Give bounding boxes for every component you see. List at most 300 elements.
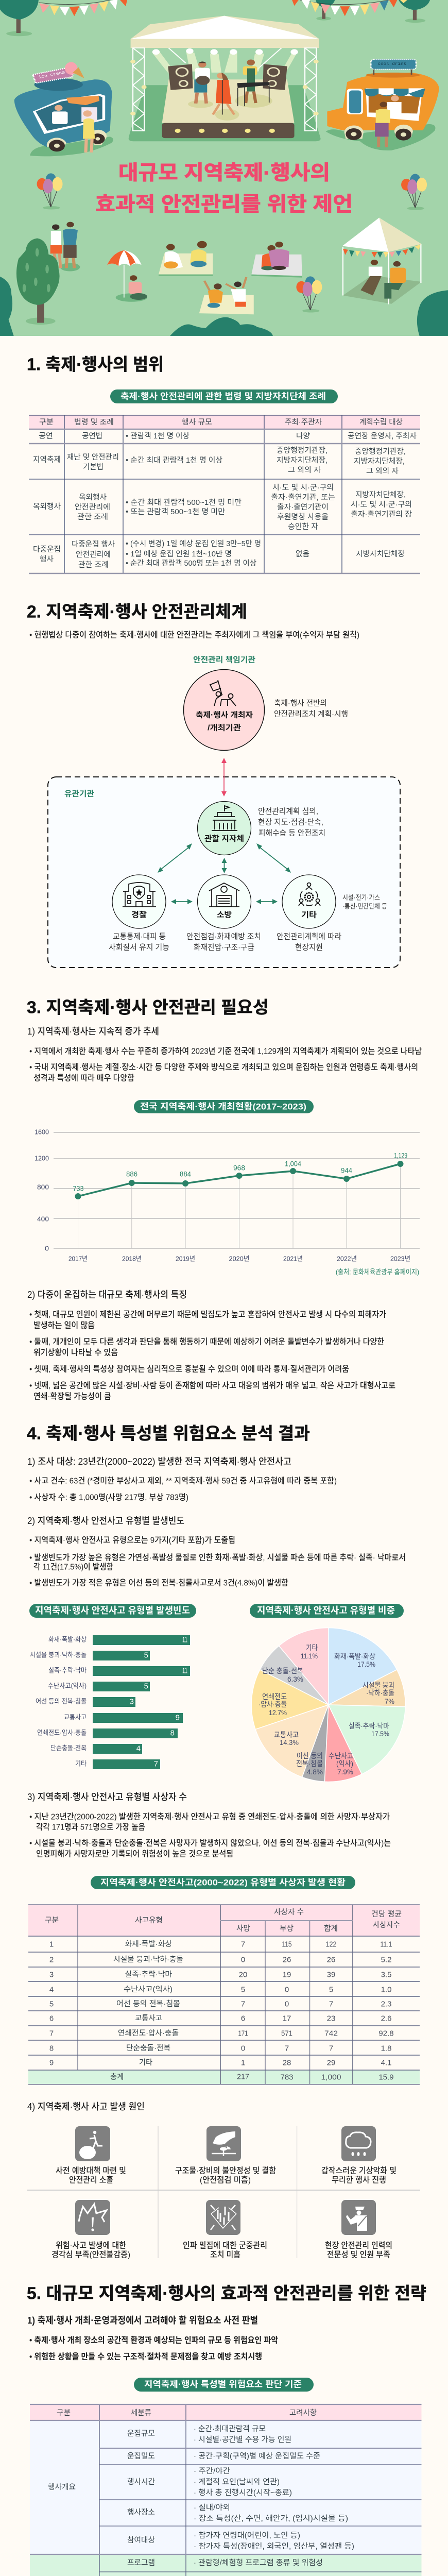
row: performance [39, 432, 417, 440]
row: local festival: 그 외의 자 [288, 466, 321, 474]
row: crowd event: 행사 [40, 555, 54, 564]
bar labels: 화재·폭발·화상 [48, 1635, 87, 1643]
pill heading: risk criteria [134, 2378, 314, 2392]
row: local festival [33, 446, 406, 476]
node: local government [198, 802, 251, 855]
bar labels: 교통사고 [64, 1714, 87, 1721]
row: outdoor event: 후원명칭 사용을 [277, 513, 329, 521]
row 9: 28 [283, 2059, 291, 2067]
group: event overview: · 주간/야간 [194, 2467, 230, 2476]
cause: sudden weather: 무리한 행사 진행 [332, 2175, 386, 2184]
pie labels: 연쇄전도 [262, 1692, 287, 1701]
subheading 4-2: 2) 지역축제·행사 안전사고 유형별 발생빈도 [27, 1516, 184, 1526]
row 6: 17 [283, 2014, 291, 2023]
cause: sudden weather [321, 2126, 397, 2184]
node: police [112, 875, 166, 928]
row 5: 7 [329, 2000, 333, 2008]
bar values: 5 [144, 1651, 148, 1660]
balloons: right [401, 174, 427, 210]
text block 3-2: • 둘째, 개개인이 모두 다른 생각과 판단을 통해 행동하기 때문에 예상하기 어려운 돌발변수가 발생하거나 다양한 [29, 1337, 384, 1347]
table header row [39, 418, 403, 427]
row 9: 기타 [139, 2058, 152, 2067]
note: other bodies role: 현장지원 [295, 943, 323, 952]
group: event overview: · 순간·최대관람객 규모 [194, 2425, 266, 2433]
header row: 사상자수 [373, 1921, 400, 1929]
row: outdoor event: 옥외행사 [79, 493, 107, 502]
row 4: 5 [329, 1986, 333, 1994]
text block 3-2: 발생하는 일이 많음 [33, 1321, 95, 1330]
row 1 [49, 1940, 392, 1948]
pill heading: legal framework [110, 389, 338, 403]
text block 3-2: • 넷째, 넓은 공간에 많은 시설·장비·사람 등이 존재함에 따라 사고 대응의 범위가 매우 넓고, 작은 사고가 대형사고로 [29, 1381, 395, 1390]
arrows: agency links [158, 843, 291, 904]
group: event overview: 행사장소 [127, 2508, 155, 2517]
row: local festival: 그 외의 자 [366, 467, 399, 476]
group: event overview: · 행사 총 진행시간(시작~종료) [194, 2488, 292, 2497]
text block 3-2: • 첫째, 대규모 인원이 제한된 공간에 머무르기 때문에 밀집도가 높고 혼잡하여 안전사고 발생 시 다수의 피해자가 [29, 1310, 386, 1319]
pill heading: casualties table: 지역축제·행사 안전사고(2000~2022) 유형별 사상자 발생 현황 [100, 1877, 346, 1888]
bar values: 11 [182, 1666, 187, 1675]
total row: 1,000 [321, 2073, 341, 2081]
title [95, 162, 353, 215]
tree: top right [316, 0, 430, 23]
text block 3-2: 위기상황이 나타날 수 있음 [33, 1348, 118, 1357]
panel: related agencies [48, 777, 400, 968]
cause: structural instability [175, 2126, 276, 2184]
group: event overview: · 공간·구획(구역)별 예상 운집밀도 수준 [194, 2452, 320, 2461]
row 1: 7 [241, 1940, 245, 1948]
note: host role: 축제·행사 전반의 [274, 699, 327, 708]
bar chart: accident frequency [30, 1635, 190, 1769]
row: performance: 다양 [296, 432, 310, 440]
pie labels: ·압사·충돌 [259, 1700, 287, 1708]
row: crowd event: • 1일 예상 운집 인원 1천~10만 명 [126, 550, 232, 558]
table header row: 구분 [39, 418, 54, 427]
pill heading: casualties table [91, 1876, 355, 1889]
row: outdoor event: 관한 조례 [77, 513, 108, 521]
pie labels: 수난사고 [329, 1752, 353, 1760]
row: crowd event: 없음 [296, 550, 309, 558]
row 3: 3.5 [381, 1970, 391, 1979]
note: fire role [186, 933, 261, 952]
table: risk criteria [30, 2404, 421, 2576]
bar values: 5 [144, 1682, 148, 1691]
row: outdoor event [33, 483, 412, 531]
pill heading: frequency [29, 1604, 196, 1618]
text block 3-1: 성격과 특성에 따라 매우 다양함 [33, 1074, 134, 1083]
row 9: 9 [49, 2059, 54, 2067]
note: others role [342, 893, 387, 910]
balloons: lower [296, 276, 322, 313]
row 4: 5 [241, 1986, 245, 1994]
note: fire role: 화재진압·구조·구급 [194, 943, 254, 952]
row 5: 어선 등의 전복·침몰 [116, 1999, 180, 2008]
header row: 사상자 수 [274, 1908, 304, 1917]
note: police role: 교통통제·대피 등 [113, 933, 166, 941]
row 8: 7 [285, 2044, 289, 2053]
bar labels: 어선 등의 전복·침몰 [36, 1697, 87, 1705]
pill heading: frequency: 지역축제·행사 안전사고 유형별 발생빈도 [35, 1605, 190, 1616]
value labels: 733 [73, 1185, 83, 1192]
text block 4-3: 인명피해가 사망자로만 기록되어 위험성이 높은 것으로 분석됨 [36, 1850, 233, 1859]
total row [110, 2072, 393, 2081]
x axis labels: 2017년 [68, 1255, 88, 1262]
text block 4-3: 각각 171명과 571명으로 가장 높음 [36, 1823, 145, 1832]
value labels: 884 [180, 1171, 191, 1178]
note: others role: 시설·전기·가스 [342, 893, 380, 902]
row 7: 7 [49, 2029, 54, 2038]
pie labels: 실족·추락·낙마 [349, 1722, 389, 1730]
food truck: cool drink: cool drink [378, 61, 406, 66]
bar labels: 실족·추락·낙마 [48, 1666, 87, 1674]
pill heading: festivals chart: 전국 지역축제·행사 개최현황(2017~2023) [140, 1101, 306, 1112]
bar labels: 단순충돌·전복 [50, 1744, 87, 1752]
node: fire service: 소방 [217, 911, 232, 919]
bunting: top right [292, 0, 407, 16]
value labels: 1,129 [394, 1152, 407, 1159]
pie labels: 12.7% [269, 1708, 287, 1717]
cause: low awareness [51, 2200, 130, 2260]
food truck: ice cream: ice cream [38, 70, 66, 80]
row 3: 20 [239, 1970, 247, 1979]
tree: top left [0, 0, 39, 36]
subheading 5-1: 1) 축제·행사 개최·운영과정에서 고려해야 할 위험요소 사전 판별 [27, 2315, 258, 2326]
row 6: 23 [327, 2014, 335, 2023]
header row [45, 1908, 402, 1933]
note: other bodies role: 안전관리계획에 따라 [277, 933, 341, 941]
section 2 bullet: • 현행법상 다중이 참여하는 축제·행사에 대한 안전관리는 주최자에게 그 책임을 부여(수익자 부담 원칙) [29, 631, 359, 640]
row: local festival: • 순간 최대 관람객 1천 명 이상 [126, 456, 222, 465]
pie labels [259, 1643, 394, 1776]
bar labels: 수난사고(익사) [48, 1682, 87, 1690]
group: event overview [48, 2425, 354, 2551]
pie labels: ·낙하·충돌 [366, 1689, 394, 1697]
y axis labels: 0 [45, 1245, 49, 1252]
stage with band [129, 16, 321, 141]
note: local government role: 피해수습 등 안전조치 [259, 828, 325, 838]
pie labels: 단순 충돌·전복 [262, 1667, 303, 1675]
row 7: 742 [324, 2029, 338, 2038]
row 6: 6 [241, 2014, 245, 2023]
subheading 4-4: 4) 지역축제·행사 사고 발생 원인 [27, 2102, 145, 2112]
y axis labels: 800 [37, 1183, 49, 1191]
pill heading: share [250, 1604, 404, 1618]
cause: crowd control [183, 2200, 267, 2260]
pie labels: 어선 등의 [297, 1752, 323, 1760]
canopy tent with couple [342, 217, 421, 304]
pie labels: (익사) [336, 1759, 353, 1768]
bar values: 11 [182, 1635, 187, 1645]
cause: lack of prevention: 사전 예방대책 마련 및 [56, 2166, 126, 2175]
text block 4-2 [29, 1535, 406, 1588]
hero illustration: festival park scene [0, 0, 448, 336]
pie labels: 기타 [306, 1643, 318, 1652]
icon grid: accident causes [27, 2126, 420, 2260]
row 5: 0 [285, 2000, 289, 2008]
row 9: 29 [327, 2059, 335, 2067]
text block 3-1: • 국내 지역축제·행사는 계절·장소·시간 등 다양한 주제와 방식으로 개최되고 있으며 운집하는 인원과 연령층도 축제·행사의 [29, 1062, 418, 1072]
title: 효과적 안전관리를 위한 제언 [95, 194, 353, 215]
cause: lack of trained staff: 전문성 및 인원 부족 [327, 2250, 390, 2260]
row: crowd event [33, 539, 405, 569]
bar values [130, 1635, 187, 1768]
header row: 고려사항 [289, 2409, 317, 2417]
section 2 heading: 2. 지역축제·행사 안전관리체계 [27, 602, 247, 621]
cause: lack of prevention [56, 2126, 126, 2184]
bar labels [30, 1635, 87, 1767]
subheading 4-1: 1) 조사 대상: 23년간(2000~2022) 발생한 전국 지역축제·행사 안전사고 [27, 1456, 291, 1467]
picnic mat: cheering friends [199, 277, 254, 314]
node: police: 경찰 [131, 911, 147, 919]
bar values: 8 [170, 1729, 175, 1737]
bar values: 4 [136, 1744, 141, 1753]
cause: low awareness: 경각심 부족(안전불감증) [51, 2250, 130, 2260]
couple with ice cream [50, 222, 80, 272]
row 8 [49, 2044, 391, 2053]
value labels: 968 [233, 1164, 245, 1172]
bar labels: 시설물 붕괴·낙하·충돌 [30, 1651, 87, 1659]
pie labels: 4.8% [307, 1768, 323, 1776]
subheading 4-3: 3) 지역축제·행사 안전사고 유형별 사상자 수 [27, 1792, 187, 1802]
cause: lack of prevention: 안전관리 소홀 [69, 2175, 113, 2184]
total row: 총계 [110, 2073, 124, 2081]
header row: 건당 평균 [371, 1910, 402, 1919]
pie labels: 교통사고 [274, 1731, 299, 1739]
row 3: 실족·추락·낙마 [125, 1970, 172, 1979]
row 8: 1.8 [381, 2044, 391, 2053]
row 6: 6 [49, 2014, 54, 2023]
table header row: 행사 규모 [182, 418, 212, 427]
group: event overview: 행사시간 [127, 2478, 155, 2486]
label: related agencies: 유관기관 [64, 789, 94, 799]
pie labels: 11.1% [301, 1652, 318, 1660]
row 5: 7 [241, 2000, 245, 2008]
row 7 [49, 2029, 394, 2038]
node: others [282, 875, 336, 928]
text block 4-2: • 지역축제·행사 안전사고 유형으로는 9가지(기타 포함)가 도출됨 [29, 1535, 235, 1545]
subheading 3-1: 1) 지역축제·행사는 지속적 증가 추세 [27, 1026, 159, 1037]
note: other bodies role [277, 933, 341, 952]
section 4 heading: 4. 축제·행사 특성별 위험요소 분석 결과 [27, 1424, 310, 1443]
row: local festival: 지역축제 [33, 455, 61, 464]
cause: sudden weather: 갑작스러운 기상악화 및 [321, 2166, 397, 2175]
picnic mat: couple two [251, 242, 302, 278]
section 3 heading: 3. 지역축제·행사 안전관리 필요성 [27, 997, 269, 1017]
bar values: 3 [130, 1697, 134, 1706]
pie labels: 7.9% [337, 1768, 353, 1776]
row 1: 11.1 [380, 1940, 392, 1948]
group: event overview: · 시설별·공간별 수용 가능 인원 [194, 2435, 291, 2444]
subheading 3-2: 2) 다중이 운집하는 대규모 축제·행사의 특징 [27, 1290, 187, 1300]
row 2: 2 [49, 1956, 54, 1964]
header row: 사망 [236, 1924, 250, 1933]
text block 4-3: • 시설물 붕괴·낙하·충돌과 단순충돌·전복은 사망자가 발생하지 않았으나, 어선 등의 전복·침몰과 수난사고(익사)는 [29, 1838, 391, 1848]
total row: 217 [237, 2072, 249, 2081]
row: crowd event: • 순간 최대 관람객 500명 또는 1천 명 이상 [126, 559, 256, 568]
table: legal framework [29, 415, 420, 573]
row 6: 교통사고 [135, 2014, 162, 2023]
text block 4-2: 각 11건(17.5%)이 발생함 [33, 1562, 113, 1571]
text block 4-1: • 사고 건수: 63건 (*경미한 부상사고 제외, ** 지역축제·행사 59건 중 사고유형에 따라 중복 포함) [29, 1477, 337, 1486]
row: performance: 공연장 운영자, 주최자 [348, 432, 417, 440]
row: outdoor event: 시·도 및 시·군·구의 [351, 500, 412, 509]
text block 5-1: • 축제·행사 개최 장소의 공간적 환경과 예상되는 인파의 규모 등 위험요인 파악 [29, 2335, 278, 2345]
total row: 15.9 [379, 2073, 393, 2081]
bar values: 9 [176, 1714, 180, 1722]
row 1: 115 [282, 1940, 291, 1948]
note: local government role: 현장 지도·점검·단속, [258, 818, 323, 826]
y axis labels: 400 [37, 1215, 49, 1223]
x axis labels: 2019년 [176, 1255, 195, 1262]
line chart: festivals per year [35, 1128, 420, 1276]
row: performance: • 관람객 1천 명 이상 [126, 432, 189, 440]
pie labels: 14.3% [280, 1738, 299, 1747]
diagram: safety management system [48, 655, 400, 968]
header row: 합계 [324, 1924, 338, 1933]
group: event overview: · 계절적 요인(날씨와 연관) [194, 2478, 280, 2486]
row 8: 8 [49, 2044, 54, 2053]
value labels: 886 [126, 1171, 137, 1178]
table header row: 법령 및 조례 [74, 418, 114, 427]
header row: 세분류 [131, 2409, 151, 2417]
row 7: 연쇄전도·압사·충돌 [118, 2029, 179, 2038]
row 2: 시설물 붕괴·낙하·충돌 [113, 1955, 183, 1964]
text block 3-2 [29, 1310, 395, 1401]
row 2: 26 [283, 1956, 291, 1964]
row: outdoor event: • 또는 관람객 500~1천 명 미만 [126, 507, 225, 516]
row 2: 26 [327, 1956, 335, 1964]
x axis labels: 2021년 [283, 1255, 303, 1262]
header row: 사고유형 [135, 1916, 163, 1925]
bar values: 7 [154, 1760, 158, 1768]
row 4: 수난사고(익사) [124, 1985, 173, 1994]
picnic mat: couple one [159, 241, 213, 276]
row 9: 1 [241, 2059, 245, 2067]
row: local festival: 중앙행정기관장, [277, 446, 328, 455]
label: responsible body: 안전관리 책임기관 [193, 655, 255, 665]
bunting: top left [39, 0, 127, 16]
row 4: 0 [285, 1986, 289, 1994]
row 5: 2.3 [381, 2000, 391, 2008]
pie labels: 시설물 붕괴 [363, 1681, 394, 1689]
header row: 부상 [280, 1924, 294, 1933]
row: local festival: 기본법 [83, 463, 104, 471]
tree: large left [16, 238, 60, 325]
row: outdoor event: 승인한 자 [288, 522, 318, 531]
pill heading: festivals chart [134, 1100, 314, 1113]
y axis labels: 1600 [35, 1128, 49, 1136]
section 1 heading: 1. 축제·행사의 범위 [27, 354, 164, 374]
row 8: 7 [329, 2044, 333, 2053]
row 7: 92.8 [378, 2029, 394, 2038]
table: casualties by type [28, 1905, 420, 2084]
row: local festival: 재난 및 안전관리 [67, 453, 119, 462]
row: outdoor event: 시·도 및 시·군·구의 [272, 483, 334, 492]
pie labels: 전복·침몰 [296, 1759, 323, 1768]
node: local government: 관할 지자체 [204, 835, 244, 843]
row 1: 화재·폭발·화상 [125, 1940, 172, 1948]
text block 3-1: • 지역에서 개최한 축제·행사 수는 꾸준히 증가하여 2023년 기준 전국에 1,129개의 지역축제가 계획되어 있는 것으로 나타남 [29, 1047, 422, 1056]
header row: 구분 [45, 1917, 59, 1925]
pill heading: legal framework: 축제·행사 안전관리에 관한 법령 및 지방자치단체 조례 [120, 392, 326, 401]
text block 4-2: • 발생빈도가 가장 적은 유형은 어선 등의 전복·침몰사고로서 3건(4.8%)이 발생함 [29, 1579, 288, 1588]
row 2: 5.2 [381, 1956, 391, 1964]
bar labels: 기타 [75, 1760, 87, 1767]
group: event overview: 운집규모 [127, 2429, 155, 2438]
pie labels: 17.5% [357, 1660, 375, 1668]
row 9 [49, 2058, 391, 2067]
table header row: 주최·주관자 [285, 418, 322, 427]
row: performance: 공연 [39, 432, 53, 440]
row 9: 4.1 [381, 2059, 391, 2067]
row 2 [49, 1955, 391, 1964]
value labels: 1,004 [285, 1160, 301, 1167]
note: police role [109, 933, 169, 952]
row: crowd event: • (수시 변경) 1일 예상 운집 인원 3만~5만 명 [126, 539, 261, 548]
cause: structural instability: 구조물·장비의 불안정성 및 결함 [175, 2166, 276, 2175]
row 4: 1.0 [381, 1986, 391, 1994]
source note: (출처: 문화체육관광부 홈페이지) [336, 1268, 419, 1276]
text block 4-3: • 지난 23년간(2000-2022) 발생한 지역축제·행사 안전사고 유형 중 연쇄전도·압사·충돌에 의한 사망자·부상자가 [29, 1812, 390, 1822]
bar labels: 연쇄전도·압사·충돌 [37, 1729, 87, 1736]
row: performance: 공연법 [82, 432, 102, 440]
group: event overview: · 장소 특성(산, 수면, 해안가, (임시)시설물 등) [194, 2514, 348, 2523]
row 3 [49, 1970, 391, 1979]
table header row: 계획수립 대상 [359, 418, 403, 427]
row 1: 1 [49, 1940, 54, 1948]
row 3: 3 [49, 1970, 54, 1979]
node: host organiser [183, 670, 265, 750]
row 8: 0 [241, 2044, 245, 2053]
text block 4-1: • 사상자 수: 총 1,000명(사망 217명, 부상 783명) [29, 1493, 188, 1502]
row: outdoor event: 출자·출연기관의 장 [351, 510, 412, 519]
row 5: 5 [49, 2000, 54, 2008]
text block 4-1 [29, 1477, 337, 1502]
food truck: ice cream [14, 62, 113, 156]
row 2: 0 [241, 1956, 245, 1964]
row: crowd event: 관한 조례 [78, 561, 109, 569]
group: event overview: 운집밀도 [127, 2452, 155, 2461]
data line [75, 1161, 404, 1199]
text block 3-2: 연쇄·확장될 가능성이 큼 [33, 1392, 111, 1401]
parasol with person [107, 250, 147, 302]
food truck: cool drink [326, 59, 439, 150]
note: host role [274, 699, 348, 718]
row: crowd event: 지방자치단체장 [356, 550, 405, 558]
section 5 heading: 5. 대규모 지역축제·행사의 효과적 안전관리를 위한 전략 [27, 2283, 426, 2303]
trees and bushes: bottom edge [0, 277, 448, 336]
row 1: 122 [325, 1940, 337, 1948]
row 5 [49, 1999, 391, 2008]
row: outdoor event: • 순간 최대 관람객 500~1천 명 미만 [126, 498, 242, 507]
pie labels: 7% [385, 1697, 394, 1705]
cause: lack of trained staff: 현장 안전관리 인력의 [325, 2241, 392, 2250]
row 6: 2.6 [381, 2014, 391, 2023]
note: others role: ·통신·민간단체 등 [342, 903, 387, 910]
note: local government role: 안전관리계획 심의, [258, 807, 318, 816]
y axis labels [35, 1128, 49, 1252]
row: crowd event: 다중운집 [33, 545, 61, 554]
row: outdoor event: 출자·출연기관, 또는 [271, 493, 335, 502]
row: local festival: 중앙행정기관장, [355, 447, 406, 456]
row 3: 19 [283, 1970, 291, 1979]
cause: lack of trained staff [325, 2200, 392, 2260]
node: host organiser: 축제·행사 개최자 [196, 711, 253, 719]
title: 대규모 지역축제·행사의 [118, 162, 330, 184]
row: outdoor event: 출자·출연기관이 [277, 503, 329, 512]
row 3: 39 [327, 1970, 335, 1979]
note: police role: 사회질서 유지 기능 [109, 943, 169, 952]
